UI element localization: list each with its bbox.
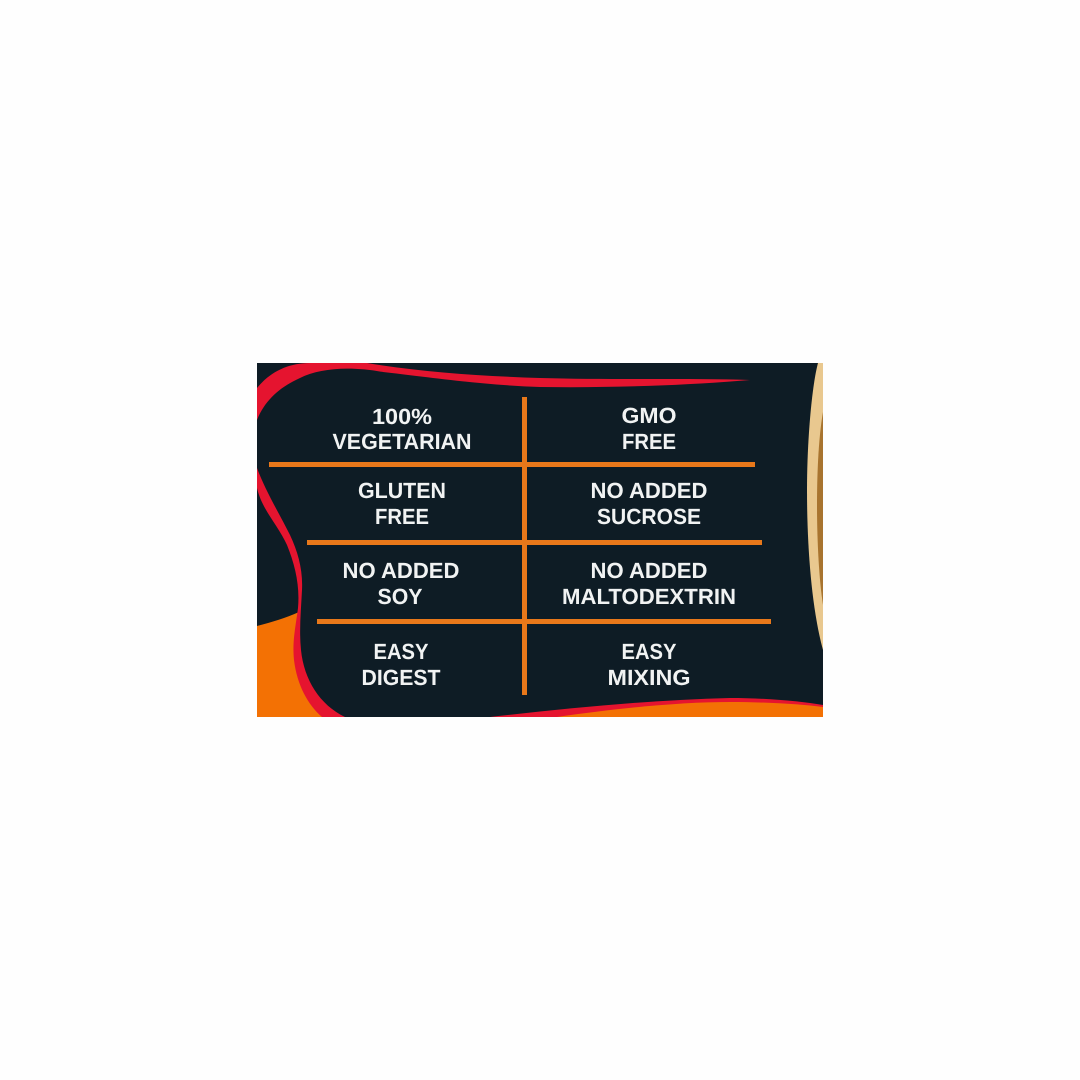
label: easy digest: DIGEST [362, 665, 441, 690]
label: 100% vegetarian: 100% [372, 404, 432, 429]
label: gluten free: FREE [375, 504, 429, 529]
label: no added maltodextrin: MALTODEXTRIN [562, 584, 736, 609]
red swoosh left and top [257, 363, 750, 420]
label: no added soy: SOY [378, 584, 423, 609]
red swoosh lower left [257, 468, 345, 717]
red swoosh bottom [490, 698, 823, 717]
label: easy mixing [608, 639, 690, 690]
orange corner bottom left [257, 612, 325, 717]
label: easy mixing: EASY [622, 639, 677, 664]
label: no added soy: NO ADDED [342, 558, 460, 583]
label: no added sucrose [590, 478, 708, 529]
label: no added maltodextrin: NO ADDED [590, 558, 708, 583]
cream bowl edge right [807, 363, 823, 650]
label: GMO free [622, 403, 676, 454]
label: easy mixing: MIXING [608, 665, 690, 690]
label: 100% vegetarian [332, 404, 472, 454]
label: GMO free: GMO [622, 403, 676, 428]
grid: vertical divider [522, 397, 527, 695]
grid: horizontal dividers [269, 462, 771, 624]
label: no added soy [342, 558, 460, 609]
label: no added maltodextrin [562, 558, 736, 609]
label: no added sucrose: SUCROSE [597, 504, 701, 529]
label: GMO free: FREE [622, 429, 676, 454]
brown bowl inner right [817, 412, 823, 605]
label: easy digest: EASY [374, 639, 429, 664]
label: 100% vegetarian: VEGETARIAN [332, 429, 472, 454]
orange band bottom [557, 702, 823, 717]
label: easy digest [362, 639, 441, 690]
panel: dark background [257, 363, 823, 717]
label: no added sucrose: NO ADDED [590, 478, 708, 503]
label: gluten free [358, 478, 446, 529]
label: gluten free: GLUTEN [358, 478, 446, 503]
